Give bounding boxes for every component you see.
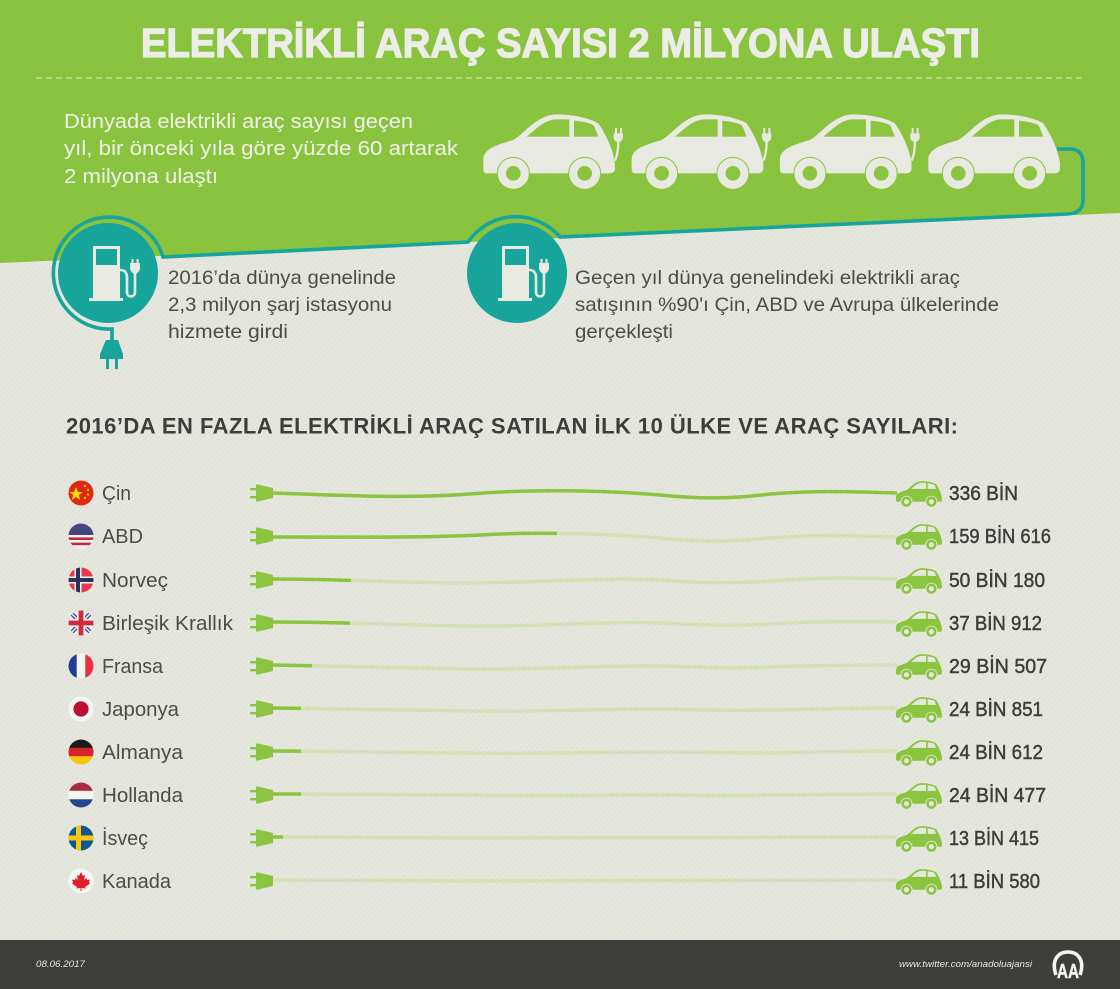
row: Almanya: 24 BİN 612 xyxy=(949,741,1043,764)
car 1 xyxy=(483,114,623,189)
icon: charging station with plug xyxy=(58,223,158,369)
row: Kanada xyxy=(68,868,1040,895)
row: Japonya: 24 BİN 851 xyxy=(949,698,1043,721)
row of electric cars xyxy=(483,114,1060,189)
row: Fransa: Fransa xyxy=(102,656,164,678)
row: Kanada: 11 BİN 580 xyxy=(949,870,1040,893)
row: Norveç xyxy=(68,567,1045,594)
row: ABD: ABD xyxy=(102,526,143,548)
car 4 xyxy=(928,114,1060,189)
date: 08.06.2017 xyxy=(36,959,86,969)
ranking list xyxy=(68,480,1051,895)
row: Hollanda: Hollanda xyxy=(102,785,184,807)
row: Norveç: Norveç xyxy=(102,570,168,592)
row: ABD: 159 BİN 616 xyxy=(949,525,1051,548)
footer bar xyxy=(0,940,1120,989)
car 3 xyxy=(780,114,920,189)
row: Çin: Çin xyxy=(102,483,131,505)
row: Birleşik Krallık: 37 BİN 912 xyxy=(949,612,1042,635)
row: Çin xyxy=(68,480,1018,507)
row: Çin: 336 BİN xyxy=(949,482,1018,505)
green header band xyxy=(0,0,1120,263)
row: Hollanda: 24 BİN 477 xyxy=(949,784,1046,807)
text: charging stations: 2016’da dünya genelinde xyxy=(168,267,396,289)
row: Birleşik Krallık: Birleşik Krallık xyxy=(102,613,234,635)
chart heading: 2016’DA EN FAZLA ELEKTRİKLİ ARAÇ SATILAN İLK 10 ÜLKE VE ARAÇ SAYILARI: xyxy=(66,414,958,438)
teal charging cable xyxy=(53,149,1083,342)
row: İsveç: 13 BİN 415 xyxy=(949,827,1039,850)
icon: charging station xyxy=(467,223,567,323)
row: Almanya xyxy=(68,739,1043,766)
text: charging stations: 2,3 milyon şarj istasyonu xyxy=(168,294,392,316)
text: charging stations xyxy=(168,267,396,343)
intro text: Dünyada elektrikli araç sayısı geçen xyxy=(64,110,413,133)
row: Japonya: Japonya xyxy=(102,699,180,721)
intro text xyxy=(64,110,459,188)
row: İsveç xyxy=(68,825,1039,852)
row: Japonya xyxy=(68,696,1043,723)
row: Kanada: Kanada xyxy=(102,871,172,893)
text: sales share: satışının %90'ı Çin, ABD ve Avrupa ülkelerinde xyxy=(575,294,999,316)
text: sales share xyxy=(575,267,999,343)
row: Fransa xyxy=(68,653,1047,680)
text: charging stations: hizmete girdi xyxy=(168,321,288,343)
logo: Anadolu Agency xyxy=(1054,952,1082,983)
twitter address: www.twitter.com/anadoluajansi xyxy=(899,959,1033,970)
text: sales share: Geçen yıl dünya genelindeki elektrikli araç xyxy=(575,267,960,289)
car 2 xyxy=(632,114,771,189)
row: ABD xyxy=(68,523,1051,550)
logo: Anadolu Agency: AA xyxy=(1057,961,1079,983)
text: sales share: gerçekleşti xyxy=(575,321,673,343)
row: Norveç: 50 BİN 180 xyxy=(949,569,1045,592)
title: ELEKTRİKLİ ARAÇ SAYISI 2 MİLYONA ULAŞTI xyxy=(141,20,980,66)
row: Birleşik Krallık xyxy=(68,610,1042,637)
row: İsveç: İsveç xyxy=(102,827,148,850)
intro text: 2 milyona ulaştı xyxy=(64,165,218,188)
intro text: yıl, bir önceki yıla göre yüzde 60 artarak xyxy=(64,137,459,160)
row: Fransa: 29 BİN 507 xyxy=(949,655,1047,678)
row: Hollanda xyxy=(68,782,1046,809)
row: Almanya: Almanya xyxy=(102,742,184,764)
